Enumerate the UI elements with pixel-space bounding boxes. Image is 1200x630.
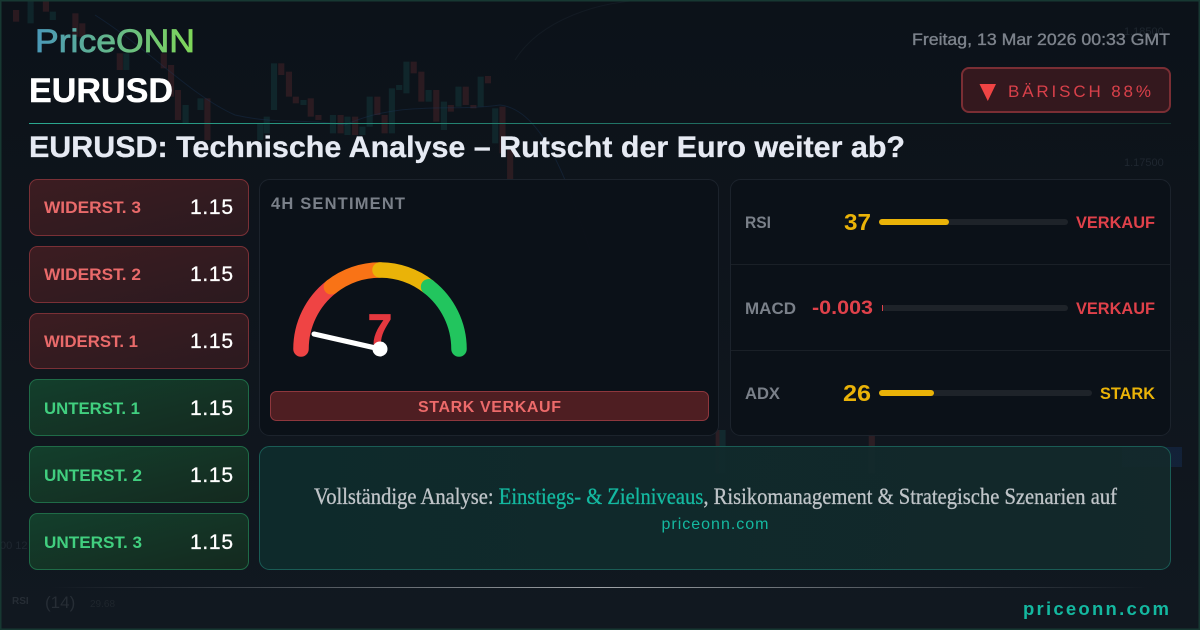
panel heading: 4H SENTIMENT [271, 195, 405, 213]
footer divider [50, 587, 1150, 588]
logo: PriceONN [35, 23, 195, 59]
support 3: 1.15 [190, 531, 233, 554]
background: 1.17500 [1124, 157, 1164, 169]
resistance 3: WIDERST. 3 [44, 199, 141, 217]
panel: indicators [730, 180, 1170, 436]
panel: 4H sentiment [260, 180, 718, 436]
gauge value: 7 [368, 306, 392, 354]
sentiment label [270, 392, 708, 420]
background: (14) [45, 593, 75, 612]
resistance 1: 1.15 [190, 330, 233, 353]
footer brand: priceonn.com [1023, 598, 1169, 619]
icon: down triangle [980, 84, 996, 101]
RSI row: RSI [745, 213, 771, 232]
symbol title: EURUSD [29, 72, 173, 110]
ADX row [745, 380, 1156, 406]
resistance 2: 1.15 [190, 263, 233, 286]
ADX row: 26 [843, 380, 871, 406]
headline: EURUSD: Technische Analyse – Rutscht der Euro weiter ab? [29, 131, 905, 164]
resistance 2: WIDERST. 2 [44, 266, 141, 284]
resistance 3: 1.15 [190, 196, 233, 219]
background: 1.18000 [1124, 93, 1164, 105]
background: 00 12 [0, 540, 28, 552]
call to action text: Vollständige Analyse: Einstiegs- & Zielniveaus, Risikomanagement & Strategische Szenarien auf [314, 484, 1117, 509]
header divider [29, 123, 1171, 124]
support 2 [30, 446, 248, 502]
resistance 3 [30, 180, 248, 236]
support 1: UNTERST. 1 [44, 400, 140, 418]
MACD row: -0.003 [812, 297, 873, 319]
sentiment badge [962, 68, 1170, 112]
MACD row: MACD [745, 299, 796, 318]
support 1 [30, 380, 248, 436]
support 3 [30, 514, 248, 570]
ADX row: STARK [1100, 384, 1156, 403]
panel: price levels [30, 180, 248, 570]
call to action link: priceonn.com [662, 516, 768, 533]
sentiment badge: BÄRISCH 88% [1008, 82, 1151, 101]
gauge [301, 270, 459, 356]
support 2: 1.15 [190, 464, 233, 487]
MACD row: VERKAUF [1076, 299, 1155, 318]
support 2: UNTERST. 2 [44, 467, 142, 485]
ADX row: ADX [745, 384, 781, 403]
panel: call to action [260, 446, 1170, 570]
date: Freitag, 13 Mar 2026 00:33 GMT [912, 31, 1170, 49]
resistance 1 [30, 314, 248, 368]
support 1: 1.15 [190, 397, 233, 420]
RSI row: VERKAUF [1076, 213, 1155, 232]
resistance 1: WIDERST. 1 [44, 333, 138, 351]
RSI row: 37 [844, 209, 871, 235]
support 3: UNTERST. 3 [44, 534, 142, 552]
sentiment label: STARK VERKAUF [418, 399, 561, 416]
background: RSI [12, 596, 29, 607]
background: 29.68 [90, 599, 115, 610]
resistance 2 [30, 246, 248, 302]
RSI row [745, 209, 1155, 235]
MACD row [745, 297, 1155, 319]
background: 1.18500 [1124, 26, 1164, 38]
gauge needle [314, 334, 388, 356]
